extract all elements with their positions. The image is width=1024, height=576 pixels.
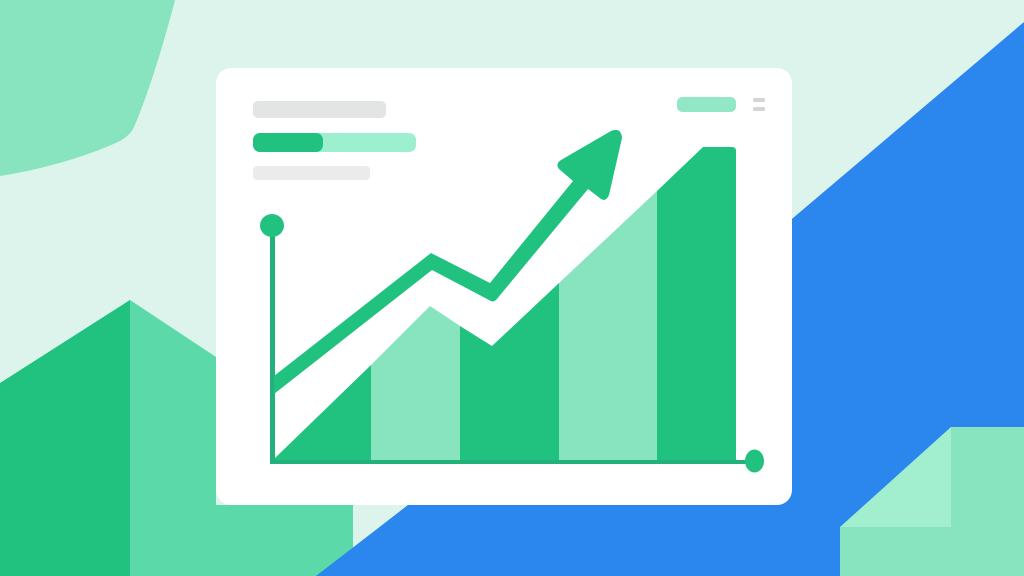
legend pill (677, 97, 736, 112)
trend arrow (274, 130, 622, 394)
bars (275, 147, 736, 460)
menu icon (753, 98, 765, 111)
title placeholder bar (253, 101, 386, 118)
chart card (216, 68, 792, 505)
y axis with dot (260, 214, 284, 464)
bottom-right folded shape (840, 427, 1024, 576)
top-left decorative shape (0, 0, 175, 176)
left building (0, 300, 353, 576)
subtitle placeholder bar (253, 166, 370, 180)
progress bar (253, 133, 416, 152)
x axis with dot (270, 450, 764, 472)
blue background shape (316, 22, 1024, 576)
